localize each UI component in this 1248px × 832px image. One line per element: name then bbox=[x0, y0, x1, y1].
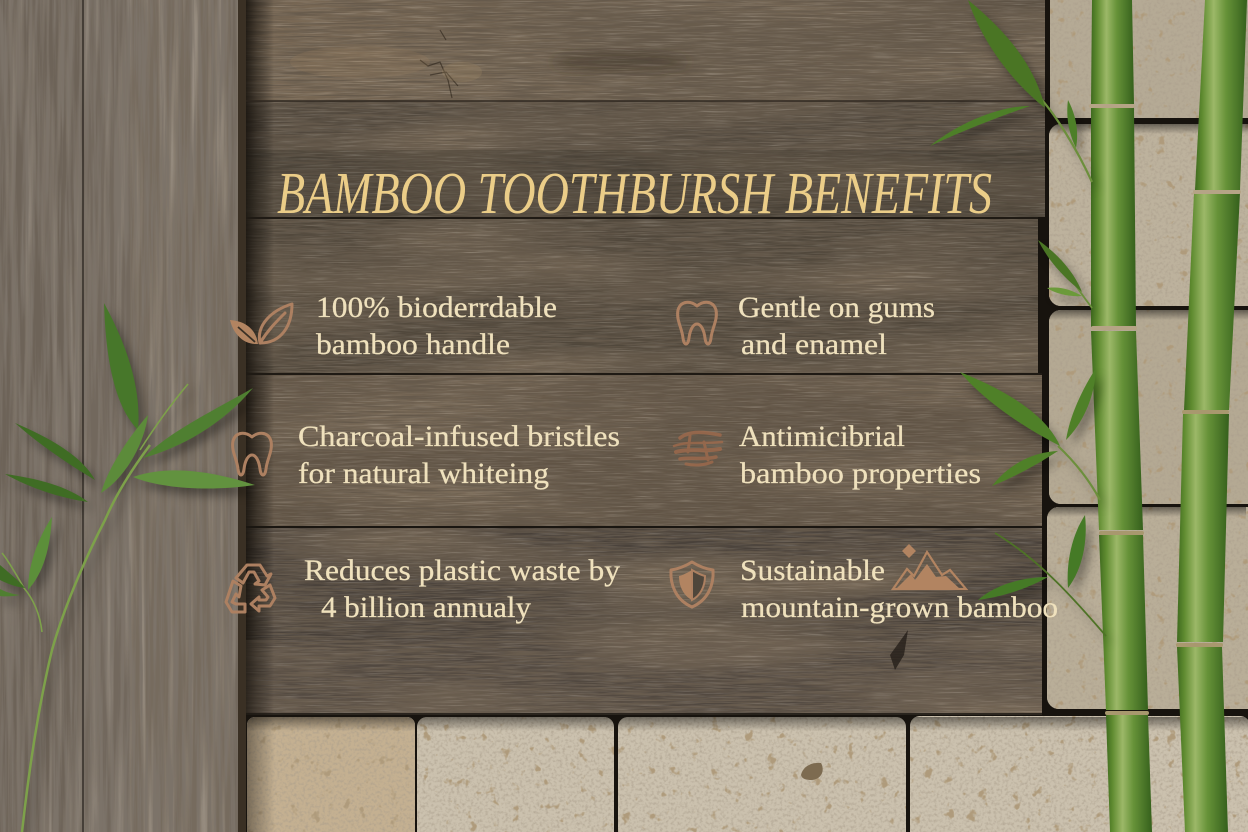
stalk: front bamboo bbox=[1089, 0, 1152, 832]
icon: tooth outline bbox=[678, 302, 716, 344]
panel: left weathered plank bbox=[0, 0, 246, 832]
stone pit bbox=[801, 763, 823, 780]
stalk: rear bamboo bbox=[1176, 0, 1247, 832]
benefit: gentle on gums: Gentle on gums bbox=[738, 291, 935, 324]
benefit: plastic waste: 4 billion annualy bbox=[321, 591, 531, 624]
benefit: mountain bamboo bbox=[671, 544, 1058, 624]
bamboo stalks bbox=[1089, 0, 1247, 832]
benefit: plastic waste: Reduces plastic waste by bbox=[304, 554, 620, 587]
benefit: antimicrobial bbox=[674, 420, 981, 490]
benefit: biodegradable handle bbox=[230, 291, 557, 361]
benefit: charcoal bristles: for natural whiteing bbox=[298, 457, 549, 490]
benefit: antimicrobial: bamboo properties bbox=[740, 457, 981, 490]
icon: antimicrobial smudge bbox=[674, 432, 722, 465]
icon: tooth bbox=[233, 433, 271, 475]
benefit: biodegradable handle: bamboo handle bbox=[316, 328, 510, 361]
benefit: charcoal bristles bbox=[233, 420, 620, 490]
icon: leaves bbox=[230, 304, 292, 344]
benefit: gentle on gums bbox=[678, 291, 935, 361]
benefit: antimicrobial: Antimicibrial bbox=[739, 420, 905, 453]
panel: horizontal wood boards bbox=[246, 0, 1046, 715]
plant: left bamboo sprig bbox=[0, 303, 255, 832]
icon: mountains bbox=[893, 544, 966, 589]
knot detail bbox=[420, 30, 458, 98]
icon: shield bbox=[671, 562, 713, 607]
icon: recycle bbox=[226, 565, 275, 612]
benefit: charcoal bristles: Charcoal-infused bristles bbox=[298, 420, 620, 453]
title: BAMBOO TOOTHBURSH BENEFITS bbox=[277, 160, 992, 226]
plant: right bamboo sprigs bbox=[930, 0, 1106, 636]
leaves bbox=[104, 303, 139, 430]
benefit: gentle on gums: and enamel bbox=[741, 328, 887, 361]
benefit: mountain bamboo: Sustainable bbox=[740, 554, 885, 587]
benefit: plastic waste bbox=[226, 554, 620, 624]
benefit: biodegradable handle: 100% bioderrdable bbox=[316, 291, 557, 324]
benefit: mountain bamboo: mountain-grown bamboo bbox=[741, 591, 1058, 624]
